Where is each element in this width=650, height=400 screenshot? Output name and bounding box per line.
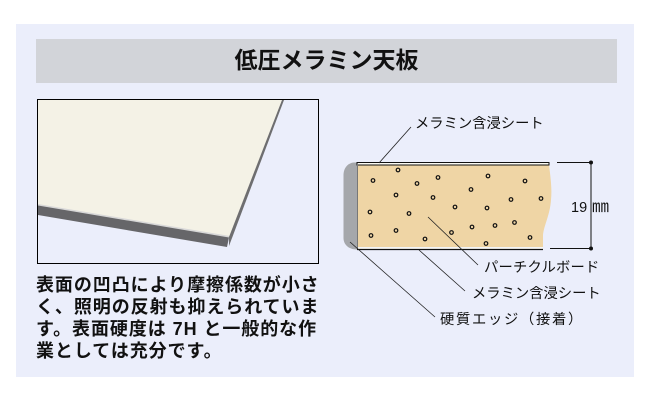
labels bbox=[415, 115, 601, 328]
labels: メラミン含浸シート bbox=[415, 115, 544, 132]
labels: メラミン含浸シート bbox=[472, 285, 601, 302]
leader lines bbox=[350, 127, 478, 317]
description text: す。表面硬度は 7H と一般的な作 bbox=[36, 319, 317, 339]
particle board core bbox=[357, 165, 551, 247]
description text bbox=[36, 275, 320, 361]
labels: 硬質エッジ（接着） bbox=[440, 310, 584, 328]
dimension: 19 mm: ㎜ bbox=[592, 197, 609, 216]
hard edge bbox=[344, 162, 357, 250]
description text: 業としては充分です。 bbox=[36, 341, 223, 361]
description text: く、照明の反射も抑えられていま bbox=[36, 297, 319, 317]
dimension: 19 mm: 19 bbox=[571, 200, 587, 216]
dimension: 19 mm bbox=[550, 160, 609, 250]
illustration: melamine board bbox=[37, 99, 319, 264]
melamine sheet bbox=[357, 162, 549, 250]
description text: 表面の凹凸により摩擦係数が小さ bbox=[36, 275, 320, 295]
labels: パーチクルボード bbox=[484, 259, 600, 276]
title bar: 低圧メラミン天板 bbox=[234, 47, 418, 73]
title bar bbox=[36, 39, 617, 83]
